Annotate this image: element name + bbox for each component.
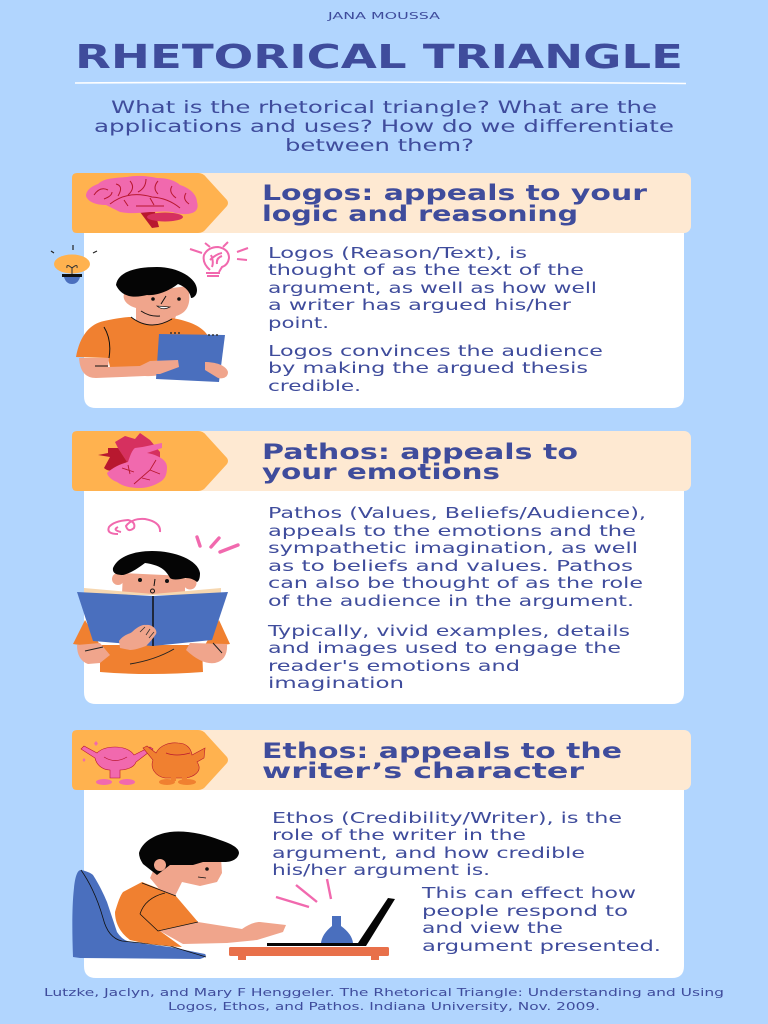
intro questions: between them? — [285, 136, 474, 156]
pathos body card — [84, 485, 684, 704]
logos text: point. — [268, 314, 329, 332]
pathos text: imagination — [268, 674, 404, 692]
logos text: Logos convinces the audience — [268, 342, 603, 360]
logos text: by making the argued thesis — [268, 359, 588, 377]
pathos text: and images used to engage the — [268, 639, 621, 657]
citation footer — [44, 986, 724, 1013]
logos banner — [72, 173, 691, 233]
pathos text: sympathetic imagination, as well — [268, 539, 638, 557]
logos text: a writer has argued his/her — [268, 296, 572, 314]
pathos text: can also be thought of as the role — [268, 574, 643, 592]
icon: pink monster — [81, 741, 153, 785]
icon: pink idea bulb — [190, 242, 248, 276]
icon: brain — [86, 176, 198, 228]
logos heading: logic and reasoning — [262, 202, 578, 227]
citation footer: Logos, Ethos, and Pathos. Indiana University, Nov. 2009. — [168, 1000, 600, 1013]
ethos text: This can effect how — [421, 884, 636, 902]
icon: orange monster — [143, 743, 205, 785]
ethos text: argument, and how credible — [272, 844, 585, 862]
logos arrow tab — [72, 173, 228, 233]
ethos text: his/her argument is. — [272, 861, 490, 879]
author name: JANA MOUSSA — [326, 11, 440, 22]
panel: ethos — [72, 730, 691, 978]
panel: pathos — [72, 431, 691, 704]
logos heading: Logos: appeals to your — [262, 181, 648, 206]
logos text: Logos (Reason/Text), is — [268, 244, 527, 262]
ethos text: role of the writer in the — [272, 826, 526, 844]
ethos heading — [262, 739, 622, 784]
citation footer: Lutzke, Jaclyn, and Mary F Henggeler. The Rhetorical Triangle: Understanding and Using — [44, 986, 724, 999]
logos text — [268, 244, 603, 395]
pathos text: Typically, vivid examples, details — [267, 622, 630, 640]
logos heading — [262, 181, 648, 227]
pathos text — [267, 504, 646, 692]
intro questions: What is the rhetorical triangle? What are the — [111, 98, 657, 118]
logos text: thought of as the text of the — [268, 261, 584, 279]
pathos arrow tab — [72, 431, 228, 491]
ethos arrow tab — [72, 730, 228, 790]
ethos heading: Ethos: appeals to the — [262, 739, 622, 764]
ethos text: argument presented. — [422, 937, 661, 955]
pathos heading — [262, 440, 578, 485]
pathos text: of the audience in the argument. — [268, 592, 634, 610]
illustration: student reading book — [73, 551, 230, 674]
pathos text: Pathos (Values, Beliefs/Audience), — [268, 504, 646, 522]
icon: pink emphasis marks — [197, 537, 238, 552]
pathos heading: Pathos: appeals to — [262, 440, 578, 465]
pathos text: reader's emotions and — [268, 657, 520, 675]
intro questions — [94, 98, 674, 156]
pathos text: appeals to the emotions and the — [268, 522, 636, 540]
title: RHETORICAL TRIANGLE — [75, 37, 683, 76]
logos text: credible. — [268, 377, 361, 395]
ethos banner — [72, 730, 691, 790]
pathos text: as to beliefs and values. Pathos — [268, 557, 633, 575]
ethos text: Ethos (Credibility/Writer), is the — [272, 809, 622, 827]
intro questions: applications and uses? How do we differentiate — [94, 117, 674, 137]
ethos text — [272, 809, 661, 955]
illustration: student at laptop — [72, 831, 395, 960]
icon: heart — [98, 433, 167, 488]
ethos heading: writer’s character — [262, 759, 585, 784]
ethos text: people respond to — [422, 902, 628, 920]
pathos heading: your emotions — [262, 460, 500, 485]
illustration: student with notepad — [76, 267, 228, 382]
pathos banner — [72, 431, 691, 491]
panel: logos — [51, 173, 691, 408]
ethos text: and view the — [422, 919, 563, 937]
icon: pink squiggle — [108, 519, 160, 534]
logos body card — [84, 225, 684, 408]
ethos body card — [84, 784, 684, 978]
icon: yellow light bulb — [51, 245, 97, 284]
logos text: argument, as well as how well — [268, 279, 597, 297]
